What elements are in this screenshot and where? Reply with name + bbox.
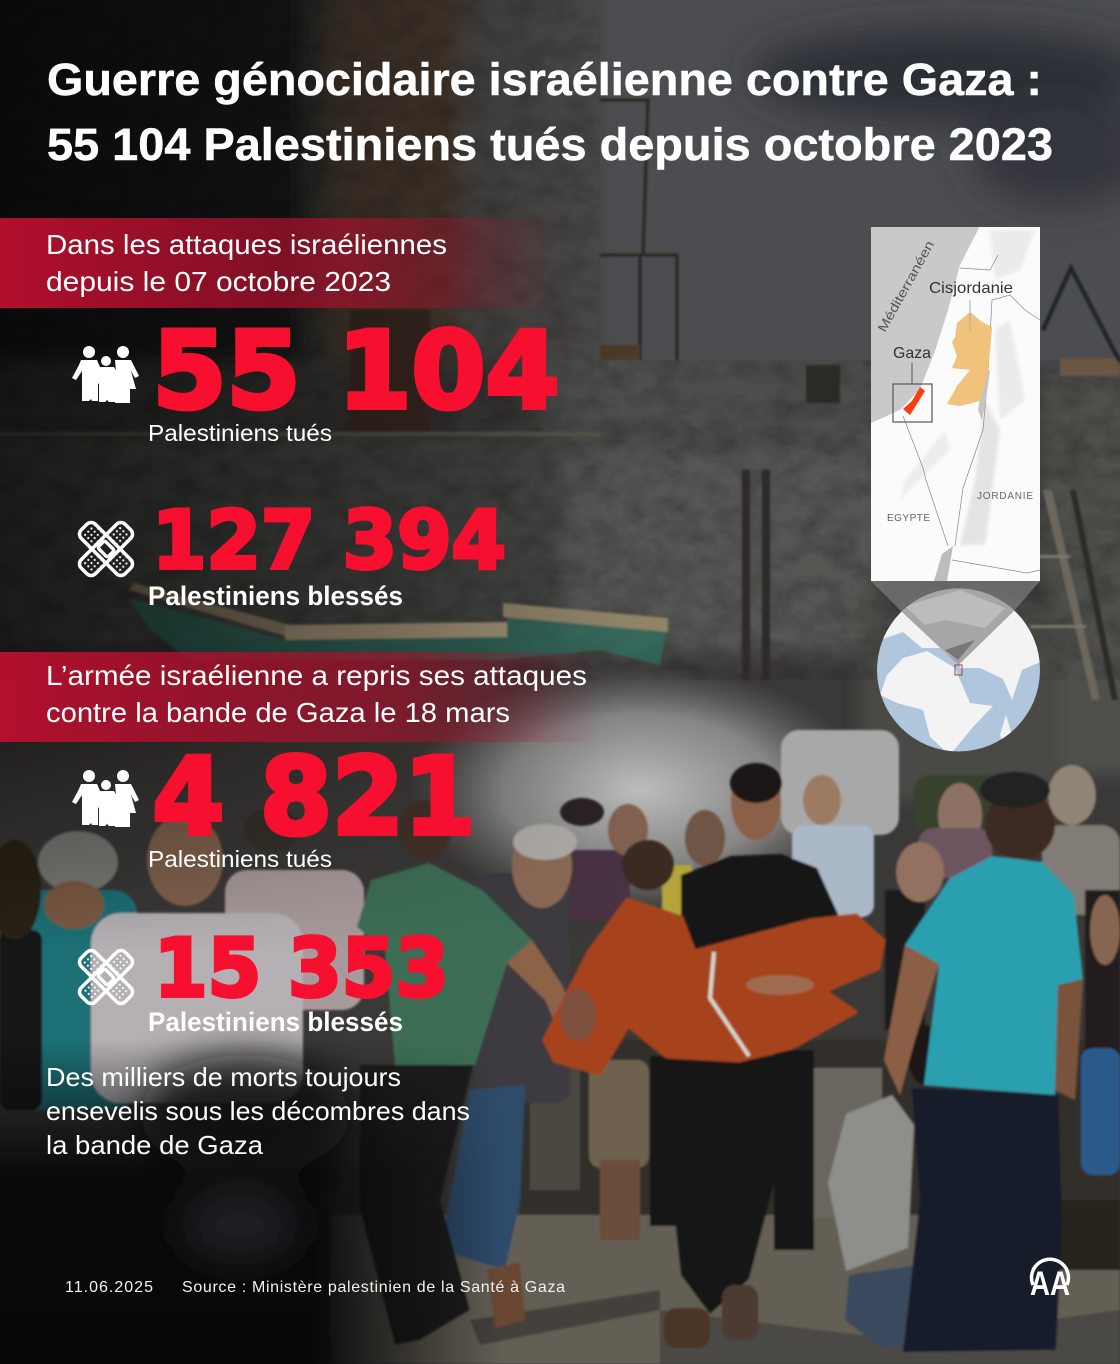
left crowd: [7, 890, 137, 1110]
borders: [903, 255, 1040, 573]
background people: [781, 730, 899, 835]
icon: bandage: [77, 520, 135, 578]
stat: 4 821 killed: 4 821: [152, 736, 476, 858]
globe: [877, 588, 1040, 752]
stat: 15 353 wounded: Palestiniens blessés: [148, 1007, 403, 1037]
text block: under the rubble: Des milliers de morts toujours: [46, 1062, 401, 1092]
footer: date and source: Source : Ministère palestinien de la Santé à Gaza: [182, 1279, 565, 1296]
map panel: JORDANIE: [977, 491, 1033, 502]
band: attacks since 7 October: [0, 218, 560, 308]
footer: date and source: 11.06.2025: [65, 1279, 153, 1296]
teal shirt man: [985, 790, 1055, 860]
band: attacks resumed 18 March: [0, 652, 600, 742]
band: attacks since 7 October: Dans les attaques israéliennes: [46, 229, 447, 260]
storm clouds: [750, 30, 1120, 205]
text block: under the rubble: ensevelis sous les décombres dans: [46, 1096, 470, 1126]
title: [47, 54, 1053, 170]
tone overlays: [0, 0, 570, 926]
title: Guerre génocidaire israélienne contre Gaza :: [47, 54, 1042, 105]
stat: 127 394 wounded: Palestiniens blessés: [148, 581, 403, 611]
map panel: Gaza: [893, 345, 931, 362]
stat: 127 394 wounded: 127 394: [152, 494, 506, 587]
blanket: [545, 900, 883, 1073]
band: attacks since 7 October: depuis le 07 octobre 2023: [46, 266, 391, 297]
smoke and pale wall behind crowd: [410, 665, 870, 915]
band: attacks resumed 18 March: L’armée israélienne a repris ses attaques: [46, 660, 587, 691]
ground: [330, 1215, 1120, 1364]
map panel: Cisjordanie: [929, 280, 1013, 297]
text block: under the rubble: la bande de Gaza: [46, 1130, 264, 1160]
striped kneeling man: [828, 1095, 914, 1271]
icon: family: [72, 770, 139, 827]
map panel: [871, 226, 1040, 581]
icon: family: [72, 346, 139, 403]
text block: under the rubble: [46, 1062, 470, 1160]
stat: 55 104 killed: 55 104: [152, 310, 560, 432]
jeans man: [440, 1085, 525, 1270]
stat: 15 353 wounded: 15 353: [154, 922, 449, 1015]
map panel: Méditerranéen: [875, 238, 937, 334]
stat: 4 821 killed: Palestiniens tués: [148, 846, 332, 872]
logo: Anadolu Agency: AA: [1030, 1265, 1070, 1303]
icon: bandage: [77, 948, 135, 1006]
map callout connector: [871, 581, 1040, 612]
texture on the wall: [0, 360, 1120, 680]
stat: 55 104 killed: Palestiniens tués: [148, 420, 332, 446]
title: 55 104 Palestiniens tués depuis octobre 2023: [47, 119, 1053, 170]
central man carrying blanket: [731, 764, 781, 840]
green shirt: [357, 863, 532, 1065]
map panel: EGYPTE: [887, 513, 930, 524]
Gaza strip: [903, 387, 925, 415]
band: attacks resumed 18 March: contre la bande de Gaza le 18 mars: [46, 697, 510, 728]
sea: [871, 226, 980, 423]
West Bank: [947, 312, 992, 406]
